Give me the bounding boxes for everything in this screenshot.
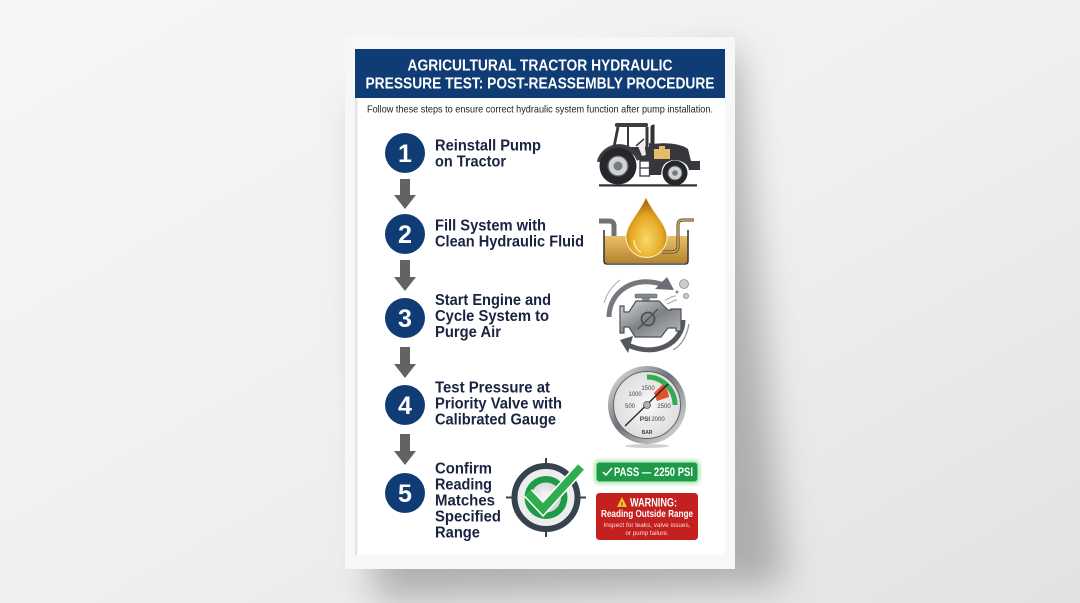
- warning box: !: [621, 502, 623, 508]
- title banner: PRESSURE TEST: POST-REASSEMBLY PROCEDURE: [366, 75, 715, 92]
- icon: pressure gauge: [608, 366, 686, 448]
- step 3: Cycle System to: [435, 308, 549, 325]
- step 5: [385, 460, 501, 542]
- step 1: [385, 133, 541, 173]
- poster frame: [345, 37, 735, 569]
- step 2: Clean Hydraulic Fluid: [435, 234, 584, 250]
- step 3: 3: [398, 305, 412, 333]
- icon: tractor: [599, 123, 700, 186]
- icon: pressure gauge: 1500: [641, 386, 655, 392]
- icon: oil tank and drop: [599, 197, 694, 264]
- icon: target check: [506, 458, 586, 537]
- icon: pressure gauge: PSI: [640, 416, 650, 423]
- title banner: AGRICULTURAL TRACTOR HYDRAULIC: [408, 58, 673, 74]
- step 1: 1: [398, 140, 412, 168]
- step 5: 5: [398, 480, 412, 508]
- step 5: Specified: [435, 508, 501, 526]
- step 5: Range: [435, 524, 480, 542]
- warning box: Inspect for leaks, valve issues,: [604, 522, 691, 529]
- step 2: Fill System with: [435, 218, 546, 234]
- step 1: on Tractor: [435, 154, 506, 170]
- warning box: WARNING:: [630, 498, 677, 510]
- icon: engine cycle: [604, 277, 689, 353]
- icon: pressure gauge: 2000: [651, 417, 665, 423]
- step 5: Matches: [435, 492, 495, 510]
- arrow 4 to 5: [394, 434, 416, 465]
- icon: pressure gauge: 500: [625, 404, 636, 410]
- step 5: Confirm: [435, 460, 492, 478]
- step 3: [385, 292, 551, 341]
- warning box: [596, 493, 698, 540]
- step 1: Reinstall Pump: [435, 138, 541, 154]
- step 2: [385, 214, 584, 254]
- pass badge: PASS — 2250 PSI: [614, 467, 693, 479]
- icon: pressure gauge: BAR: [642, 430, 653, 436]
- step 3: Purge Air: [435, 324, 501, 341]
- step 4: 4: [398, 392, 412, 420]
- step 5: Reading: [435, 476, 492, 494]
- step 4: Priority Valve with: [435, 396, 562, 412]
- step 4: [385, 380, 562, 428]
- warning box: or pump failure.: [626, 530, 669, 537]
- icon: pressure gauge: 2500: [657, 404, 671, 410]
- title banner: [355, 49, 725, 98]
- step 4: Test Pressure at: [435, 380, 551, 396]
- arrow 2 to 3: [394, 260, 416, 291]
- warning box: Reading Outside Range: [601, 509, 693, 520]
- arrow 1 to 2: [394, 179, 416, 209]
- step 4: Calibrated Gauge: [435, 412, 556, 428]
- frame shadow: [360, 50, 785, 600]
- subtitle: Follow these steps to ensure correct hydraulic system function after pump installation.: [367, 104, 713, 116]
- step 3: Start Engine and: [435, 292, 551, 309]
- arrow 3 to 4: [394, 347, 416, 378]
- icon: pressure gauge: 1000: [628, 392, 642, 398]
- pass badge: [594, 460, 700, 484]
- step 2: 2: [398, 221, 412, 249]
